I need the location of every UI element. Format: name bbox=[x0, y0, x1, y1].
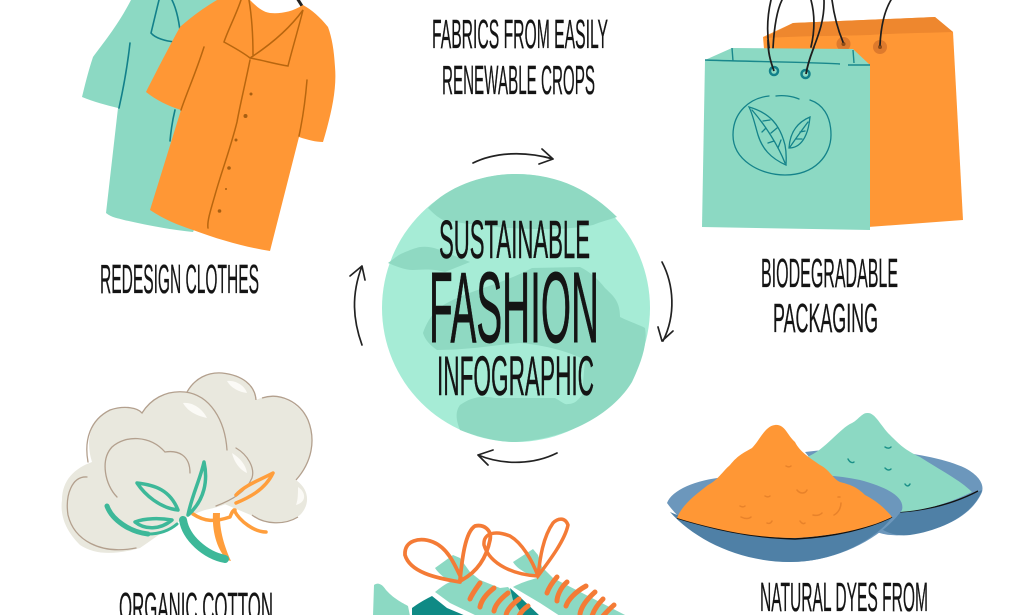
icon: right shoe bbox=[513, 549, 627, 615]
panel: central globe: INFOGRAPHIC bbox=[437, 344, 594, 407]
icon: green leaves bbox=[135, 462, 206, 528]
icon: laces bbox=[405, 519, 614, 615]
panel: shoes bbox=[373, 519, 627, 615]
icon: teal bag bbox=[702, 40, 870, 230]
panel: natural dyes bbox=[667, 413, 982, 615]
icon: orange bag bbox=[763, 17, 963, 227]
icon: orange stalk bbox=[193, 473, 273, 532]
arrow: left bbox=[350, 266, 365, 345]
arrow: top bbox=[473, 149, 553, 164]
panel: central globe: FASHION bbox=[429, 252, 599, 364]
panel: redesign clothes bbox=[82, 0, 335, 302]
arrow: bottom bbox=[478, 450, 557, 465]
icon: bag handles bbox=[768, 0, 891, 72]
icon: leaf logo bbox=[733, 96, 831, 175]
panel: organic cotton bbox=[62, 373, 312, 615]
arrow: right bbox=[658, 262, 673, 341]
text: RENEWABLE CROPS bbox=[442, 57, 595, 103]
icon: teal shirt bbox=[82, 0, 240, 232]
icon: right bowl bbox=[805, 413, 982, 535]
title bbox=[429, 210, 599, 407]
label: fabrics from easily renewable crops bbox=[432, 11, 608, 103]
icon: orange shirt bbox=[146, 0, 335, 251]
panel: central globe bbox=[382, 174, 650, 442]
text: FABRICS FROM EASILY bbox=[432, 11, 608, 57]
panel: biodegradable packaging bbox=[702, 0, 963, 341]
panel: central globe: SUSTAINABLE bbox=[439, 210, 590, 270]
icon: globe bbox=[382, 174, 650, 442]
label: biodegradable packaging bbox=[761, 250, 898, 341]
label: biodegradable packaging: PACKAGING bbox=[773, 295, 878, 341]
icon: left shoe bbox=[373, 555, 540, 615]
icon: cotton plant bbox=[62, 373, 312, 561]
panel: redesign clothes: REDESIGN CLOTHES bbox=[100, 256, 259, 302]
icon: left bowl bbox=[667, 425, 902, 562]
icon: hanger hook bbox=[297, 0, 302, 6]
icon: teal powder bbox=[807, 413, 972, 512]
icon: orange powder bbox=[677, 425, 892, 538]
